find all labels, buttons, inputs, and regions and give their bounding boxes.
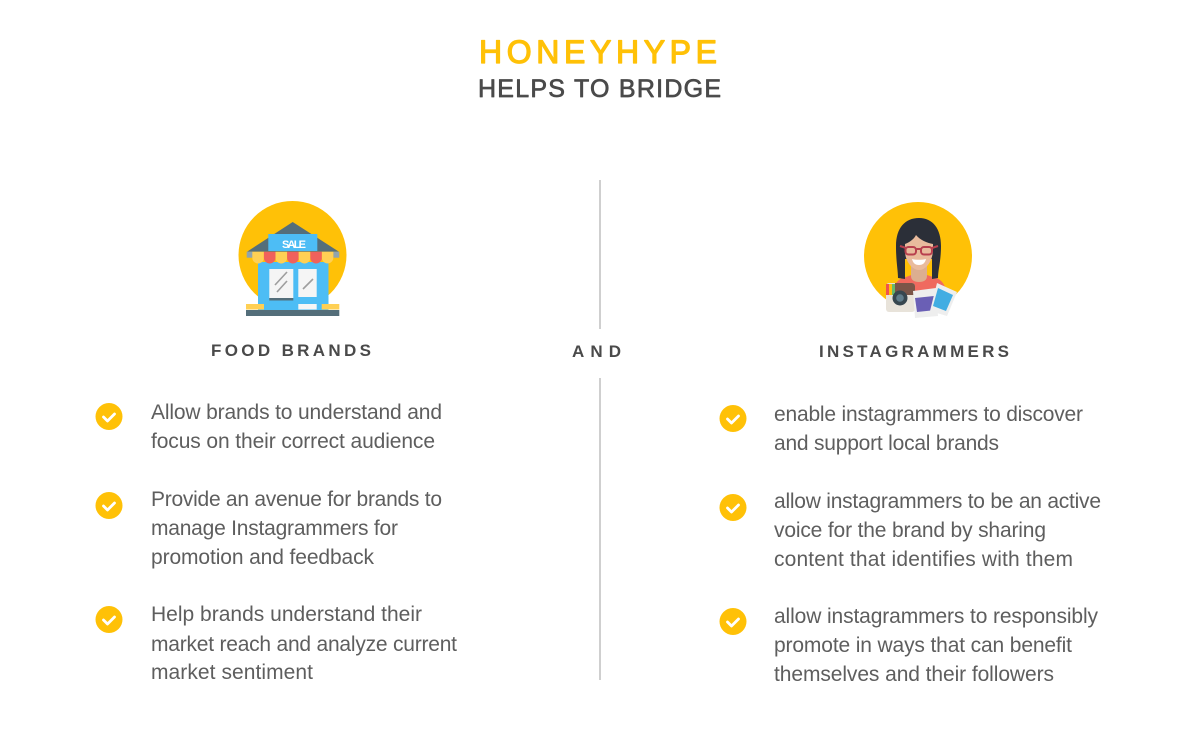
label: and: AND [572, 342, 621, 361]
benefit text: focus on their correct audience [151, 430, 435, 453]
benefit text [774, 490, 1101, 571]
benefit text: themselves and their followers [774, 663, 1054, 686]
benefit text: Help brands understand their [151, 603, 422, 626]
benefit text: and support local brands [774, 432, 999, 455]
benefit text [774, 403, 1083, 455]
icon: food brand store: SALE [282, 239, 306, 251]
benefit text: voice for the brand by sharing [774, 519, 1046, 542]
benefit text: market reach and analyze current [151, 633, 457, 656]
panel: food brands benefits [96, 401, 457, 684]
title: HELPS TO BRIDGE [478, 75, 721, 103]
check icon [96, 492, 122, 519]
benefit text: promote in ways that can benefit [774, 634, 1072, 657]
panel: instagrammers benefits [720, 403, 1101, 686]
benefit text: market sentiment [151, 661, 313, 684]
benefit text: content that identifies with them [774, 548, 1073, 571]
benefit text: allow instagrammers to responsibly [774, 605, 1098, 628]
benefit text [151, 401, 442, 453]
benefit text [774, 605, 1098, 686]
benefit text [151, 488, 442, 569]
icon: food brand store [238, 201, 346, 316]
title [478, 34, 721, 103]
benefit text [151, 603, 457, 684]
benefit text: Provide an avenue for brands to [151, 488, 442, 511]
check icon [720, 405, 746, 432]
benefit text: promotion and feedback [151, 546, 374, 569]
heading: instagrammers: INSTAGRAMMERS [819, 342, 1009, 361]
center divider [599, 180, 601, 680]
benefit text: enable instagrammers to discover [774, 403, 1083, 426]
check icon [720, 608, 746, 635]
benefit text: Allow brands to understand and [151, 401, 442, 424]
heading: food brands: FOOD BRANDS [211, 341, 371, 360]
check icon [720, 494, 746, 521]
benefit text: allow instagrammers to be an active [774, 490, 1101, 513]
title: HONEYHYPE [479, 34, 717, 70]
check icon [96, 403, 122, 430]
check icon [96, 606, 122, 633]
benefit text: manage Instagrammers for [151, 517, 398, 540]
icon: instagrammer [864, 202, 972, 318]
